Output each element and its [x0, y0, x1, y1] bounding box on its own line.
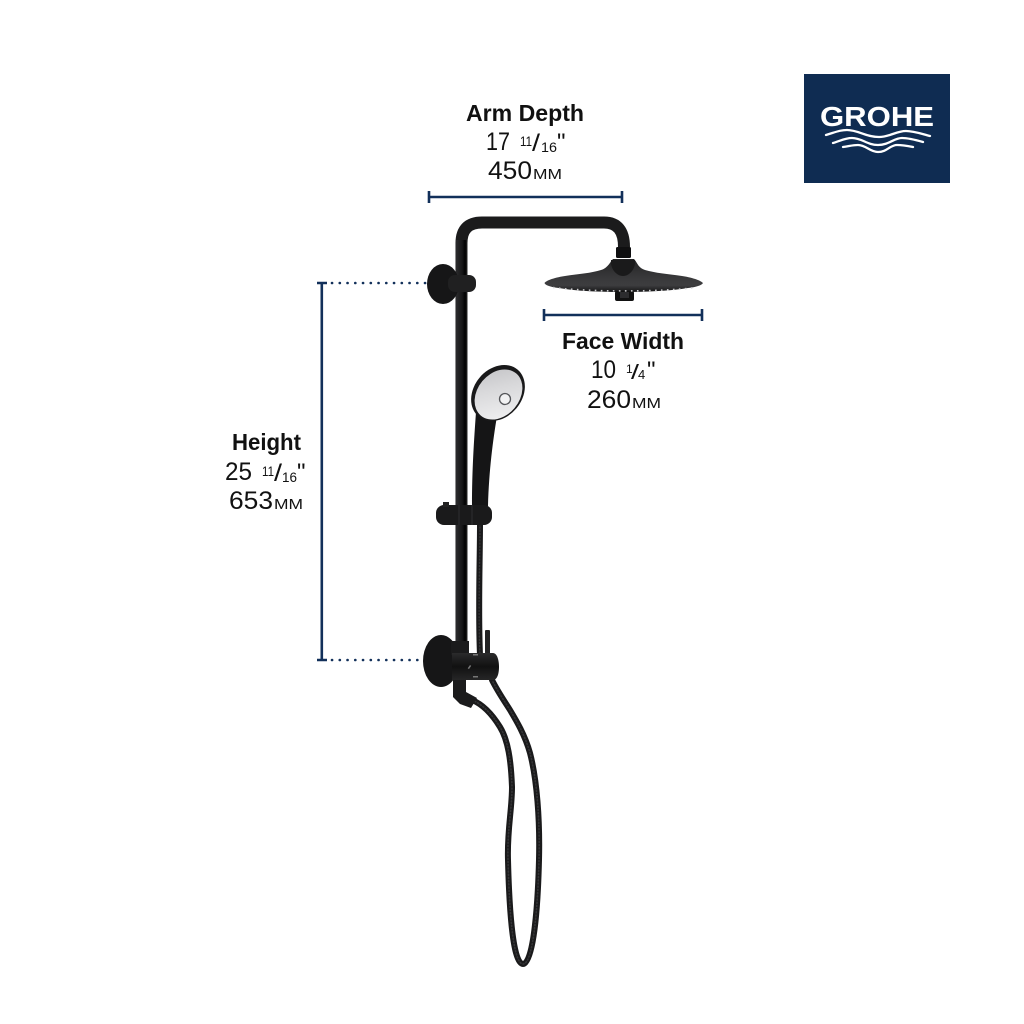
face width label: 260 — [587, 386, 631, 414]
arm connector — [616, 247, 631, 258]
arm depth label: 16 — [541, 139, 557, 155]
face width label: " — [647, 357, 656, 384]
arm depth label: 11 — [520, 133, 532, 149]
face width label: / — [631, 362, 640, 384]
height label: 25 — [225, 458, 252, 486]
arm depth label — [466, 100, 584, 185]
sliding holder — [436, 502, 492, 525]
face width label: Face Width — [562, 328, 684, 354]
arm depth label: / — [532, 130, 540, 157]
height label: " — [297, 459, 306, 486]
hoses — [472, 524, 539, 964]
height label: MM — [274, 496, 303, 513]
arm depth label: 17 — [486, 128, 510, 156]
shower system — [423, 222, 703, 964]
face width label: MM — [632, 395, 661, 412]
face width label: 10 — [591, 356, 616, 384]
hand shower — [460, 354, 536, 506]
GROHE logo: GROHE — [820, 101, 934, 132]
height label — [225, 429, 306, 515]
height label: 11 — [262, 463, 274, 479]
arm depth label: Arm Depth — [466, 100, 584, 126]
main rail and arm — [462, 222, 624, 645]
arm depth label: 450 — [488, 157, 532, 185]
face width label: 1 — [626, 362, 633, 376]
face width label: 4 — [638, 367, 645, 382]
arm depth dimension line — [429, 191, 622, 203]
height label: 653 — [229, 487, 273, 515]
face width dimension line — [544, 309, 702, 321]
valve and lower wall mount — [423, 630, 499, 708]
upper wall mount — [427, 264, 476, 304]
face width label — [562, 328, 684, 414]
arm depth label: MM — [533, 166, 562, 183]
GROHE logo — [804, 74, 950, 183]
rain shower head — [544, 259, 703, 301]
height label: Height — [232, 429, 301, 455]
height dimension line — [317, 283, 426, 660]
height label: / — [274, 460, 282, 487]
height label: 16 — [282, 469, 297, 485]
arm depth label: " — [557, 129, 566, 156]
